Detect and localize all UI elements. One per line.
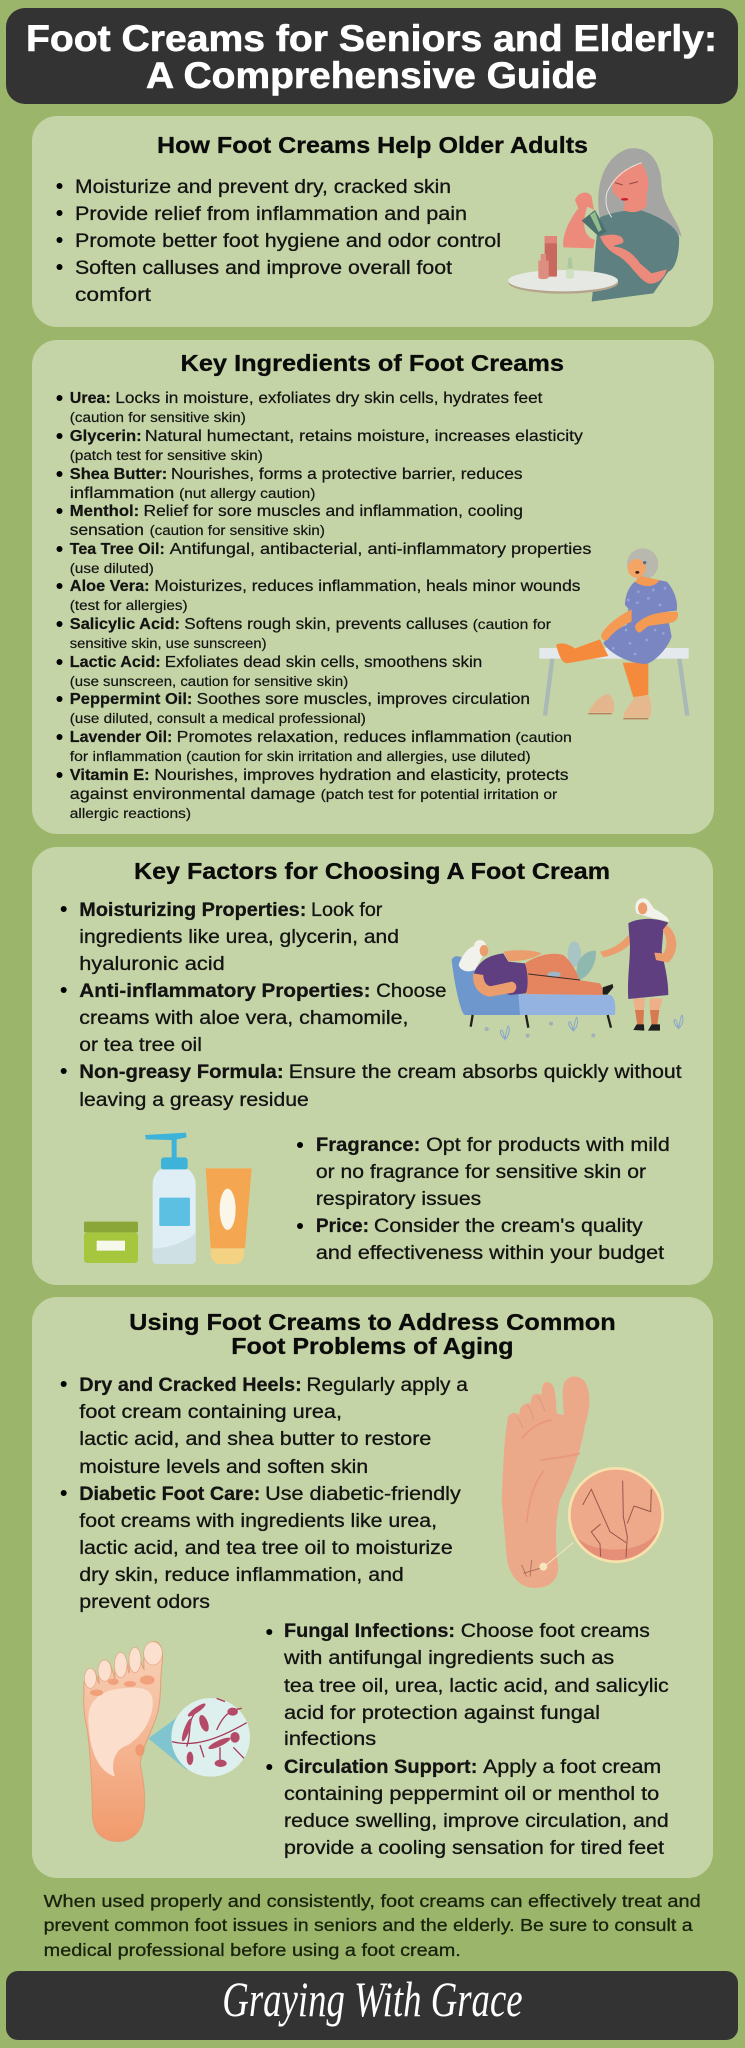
illustration: older woman on bench raising her foot bbox=[539, 548, 689, 719]
factor: anti-inflammatory properties: or tea tree oil bbox=[79, 1034, 202, 1056]
factor: fragrance: Fragrance: bbox=[316, 1134, 420, 1156]
factor: moisturizing properties: Look for bbox=[311, 899, 383, 921]
problem: dry and cracked heels: moisture levels and soften skin bbox=[79, 1456, 368, 1478]
problem: fungal infections: Choose foot creams bbox=[461, 1620, 650, 1642]
factor: fragrance: respiratory issues bbox=[316, 1188, 481, 1210]
problem: fungal infections: Fungal Infections: bbox=[284, 1620, 455, 1642]
heading: key factors: Key Factors for Choosing A Foot Cream bbox=[134, 858, 610, 884]
title banner: A Comprehensive Guide bbox=[146, 55, 597, 96]
bullet list: benefits: Moisturize and prevent dry, cracked skin bbox=[75, 176, 451, 198]
ingredient: shea butter bbox=[56, 466, 523, 502]
ingredient: lavender oil: (caution bbox=[515, 730, 572, 745]
panel: using foot creams for common foot problems bbox=[32, 1297, 713, 1878]
ingredient: urea: (caution for sensitive skin) bbox=[70, 410, 246, 425]
problem: fungal infections: infections bbox=[284, 1728, 376, 1750]
ingredient: lavender oil: Lavender Oil: bbox=[70, 729, 172, 746]
ingredient: salicylic acid: sensitive skin, use sunscreen) bbox=[70, 636, 266, 651]
factor: anti-inflammatory properties: Choose bbox=[376, 980, 446, 1002]
illustration: woman on couch with caregiver standing bbox=[452, 898, 683, 1039]
ingredient: peppermint oil bbox=[56, 691, 530, 726]
heading: using foot creams: Using Foot Creams to Address Common bbox=[129, 1309, 616, 1335]
illustration: woman applying cream at a table bbox=[508, 148, 682, 302]
heading: key ingredients: Key Ingredients of Foot Creams bbox=[180, 350, 564, 376]
ingredient: vitamin e: Nourishes, improves hydration and elasticity, protects bbox=[154, 767, 569, 784]
problem: dry and cracked heels: Dry and Cracked Heels: bbox=[79, 1374, 302, 1396]
factor: price: Consider the cream's quality bbox=[374, 1215, 643, 1237]
panel: how foot creams help older adults bbox=[32, 116, 713, 327]
factor: moisturizing properties: ingredients like urea, glycerin, and bbox=[79, 926, 399, 948]
ingredient: menthol: (caution for sensitive skin) bbox=[150, 523, 325, 538]
footer banner: brand name bbox=[6, 1971, 738, 2040]
ingredient: vitamin e bbox=[56, 767, 569, 821]
footer banner: brand name: Graying With Grace bbox=[222, 1971, 523, 2027]
ingredient: glycerin: Natural humectant, retains moisture, increases elasticity bbox=[145, 428, 583, 445]
ingredient: menthol: sensation bbox=[70, 522, 144, 539]
ingredient: lavender oil: (caution for skin irritation and allergies, use diluted) bbox=[186, 749, 531, 764]
illustration: foot with cracked heel magnified bbox=[502, 1376, 663, 1588]
problem: fungal infections: acid for protection against fungal bbox=[284, 1702, 600, 1724]
problem: circulation support: reduce swelling, improve circulation, and bbox=[284, 1810, 669, 1832]
problem: circulation support: provide a cooling sensation for tired feet bbox=[284, 1837, 665, 1859]
ingredient: tea tree oil: Antifungal, antibacterial, anti-inflammatory properties bbox=[170, 541, 591, 558]
closing note: When used properly and consistently, foot creams can effectively treat and bbox=[44, 1891, 701, 1911]
ingredient: urea: Locks in moisture, exfoliates dry skin cells, hydrates feet bbox=[115, 390, 543, 407]
panel: key ingredients of foot creams bbox=[32, 340, 714, 834]
problem: fungal infections: with antifungal ingredients such as bbox=[283, 1647, 614, 1669]
closing note bbox=[44, 1891, 701, 1960]
ingredient: aloe vera: Moisturizes, reduces inflammation, heals minor wounds bbox=[154, 578, 580, 595]
ingredient: peppermint oil: Peppermint Oil: bbox=[70, 691, 192, 708]
ingredient: shea butter: Shea Butter: bbox=[70, 466, 167, 483]
ingredient: lavender oil bbox=[56, 729, 572, 764]
heading: using foot creams: Foot Problems of Aging bbox=[231, 1333, 514, 1359]
factor: non-greasy formula: Non-greasy Formula: bbox=[79, 1061, 284, 1083]
problem: fungal infections bbox=[266, 1620, 669, 1750]
factor: moisturizing properties: Moisturizing Properties: bbox=[79, 899, 306, 921]
ingredient: urea bbox=[56, 390, 543, 425]
factor: moisturizing properties bbox=[61, 899, 399, 975]
ingredient: aloe vera: Aloe Vera: bbox=[70, 578, 150, 595]
factor: non-greasy formula: Ensure the cream absorbs quickly without bbox=[289, 1061, 682, 1083]
ingredient: lavender oil: Promotes relaxation, reduces inflammation bbox=[177, 729, 511, 746]
ingredient: salicylic acid: Salicylic Acid: bbox=[70, 616, 180, 633]
factor: anti-inflammatory properties bbox=[61, 980, 446, 1056]
ingredient: peppermint oil: Soothes sore muscles, improves circulation bbox=[197, 691, 530, 708]
problem: circulation support bbox=[266, 1756, 669, 1859]
problem: dry and cracked heels bbox=[61, 1374, 468, 1478]
ingredient: shea butter: (nut allergy caution) bbox=[179, 486, 315, 501]
problem: diabetic foot care: prevent odors bbox=[79, 1591, 210, 1613]
ingredient: menthol: Relief for sore muscles and inflammation, cooling bbox=[144, 503, 523, 520]
bullet list: benefits: Promote better foot hygiene and odor control bbox=[75, 230, 501, 252]
ingredient: glycerin bbox=[56, 428, 583, 463]
bullet list: benefits: comfort bbox=[75, 284, 152, 306]
problem: fungal infections: tea tree oil, urea, lactic acid, and salicylic bbox=[284, 1675, 669, 1697]
factor: fragrance: Opt for products with mild bbox=[426, 1134, 670, 1156]
problem: diabetic foot care: foot creams with ingredients like urea, bbox=[79, 1510, 437, 1532]
ingredient: vitamin e: allergic reactions) bbox=[70, 806, 191, 821]
factor: price: and effectiveness within your budget bbox=[316, 1242, 665, 1264]
ingredient: shea butter: Nourishes, forms a protective barrier, reduces bbox=[171, 466, 523, 483]
problem: diabetic foot care: dry skin, reduce inflammation, and bbox=[79, 1564, 404, 1586]
factor: price bbox=[297, 1215, 665, 1264]
factor: moisturizing properties: hyaluronic acid bbox=[79, 953, 225, 975]
title banner bbox=[6, 8, 738, 104]
ingredient: vitamin e: (patch test for potential irritation or bbox=[321, 787, 558, 802]
problem: circulation support: Circulation Support: bbox=[284, 1756, 477, 1778]
closing note: prevent common foot issues in seniors and the elderly. Be sure to consult a bbox=[44, 1915, 693, 1935]
factor: anti-inflammatory properties: creams with aloe vera, chamomile, bbox=[79, 1007, 409, 1029]
ingredient: glycerin: (patch test for sensitive skin) bbox=[70, 448, 263, 463]
ingredient: vitamin e: Vitamin E: bbox=[70, 767, 150, 784]
factor: price: Price: bbox=[316, 1215, 369, 1237]
problem: circulation support: containing peppermint oil or menthol to bbox=[284, 1783, 659, 1805]
ingredient: peppermint oil: (use diluted, consult a medical professional) bbox=[70, 711, 366, 726]
ingredient: salicylic acid: (caution for bbox=[473, 617, 552, 632]
ingredient: lactic acid: Exfoliates dead skin cells, smoothens skin bbox=[165, 654, 482, 671]
factor: fragrance bbox=[297, 1134, 670, 1210]
ingredient: salicylic acid bbox=[56, 616, 552, 651]
ingredient: tea tree oil: Tea Tree Oil: bbox=[70, 541, 165, 558]
ingredient: tea tree oil: (use diluted) bbox=[70, 561, 154, 576]
illustration: foot with fungal infection magnified bbox=[84, 1642, 250, 1841]
problem: diabetic foot care: Use diabetic-friendly bbox=[265, 1483, 461, 1505]
ingredient: shea butter: inflammation bbox=[70, 485, 174, 502]
title banner: Foot Creams for Seniors and Elderly: bbox=[26, 18, 717, 59]
bullet list: benefits bbox=[56, 176, 501, 306]
ingredient: aloe vera bbox=[56, 578, 580, 613]
illustration: jar, pump bottle and tube bbox=[84, 1133, 252, 1264]
ingredient: aloe vera: (test for allergies) bbox=[70, 598, 188, 613]
problem: dry and cracked heels: foot cream containing urea, bbox=[79, 1401, 342, 1423]
ingredient: menthol bbox=[56, 503, 523, 539]
problem: diabetic foot care bbox=[61, 1483, 461, 1613]
ingredient: lavender oil: for inflammation bbox=[70, 749, 182, 764]
factor: non-greasy formula: leaving a greasy residue bbox=[79, 1089, 309, 1111]
heading: using foot creams bbox=[129, 1309, 616, 1359]
factor: non-greasy formula bbox=[61, 1061, 682, 1111]
panel: key factors for choosing a foot cream bbox=[32, 847, 713, 1285]
ingredient: lactic acid: Lactic Acid: bbox=[70, 654, 161, 671]
heading: how foot creams help: How Foot Creams Help Older Adults bbox=[157, 132, 588, 158]
ingredient: menthol: Menthol: bbox=[70, 503, 139, 520]
ingredient: salicylic acid: Softens rough skin, prevents calluses bbox=[184, 616, 468, 633]
ingredient: lactic acid: (use sunscreen, caution for sensitive skin) bbox=[70, 674, 348, 689]
ingredient: tea tree oil bbox=[56, 541, 591, 576]
closing note: medical professional before using a foot cream. bbox=[44, 1940, 461, 1960]
problem: diabetic foot care: Diabetic Foot Care: bbox=[79, 1483, 260, 1505]
bullet list: benefits: Soften calluses and improve overall foot bbox=[75, 257, 453, 279]
ingredient: glycerin: Glycerin: bbox=[70, 428, 142, 445]
problem: circulation support: Apply a foot cream bbox=[483, 1756, 661, 1778]
factor: anti-inflammatory properties: Anti-inflammatory Properties: bbox=[79, 980, 371, 1002]
ingredient: urea: Urea: bbox=[70, 390, 111, 407]
problem: dry and cracked heels: Regularly apply a bbox=[306, 1374, 468, 1396]
bullet list: benefits: Provide relief from inflammation and pain bbox=[75, 203, 467, 225]
ingredient: lactic acid bbox=[56, 654, 482, 689]
ingredient: vitamin e: against environmental damage bbox=[70, 786, 316, 803]
problem: dry and cracked heels: lactic acid, and shea butter to restore bbox=[79, 1428, 431, 1450]
factor: fragrance: or no fragrance for sensitive skin or bbox=[316, 1161, 647, 1183]
problem: diabetic foot care: lactic acid, and tea tree oil to moisturize bbox=[79, 1537, 453, 1559]
